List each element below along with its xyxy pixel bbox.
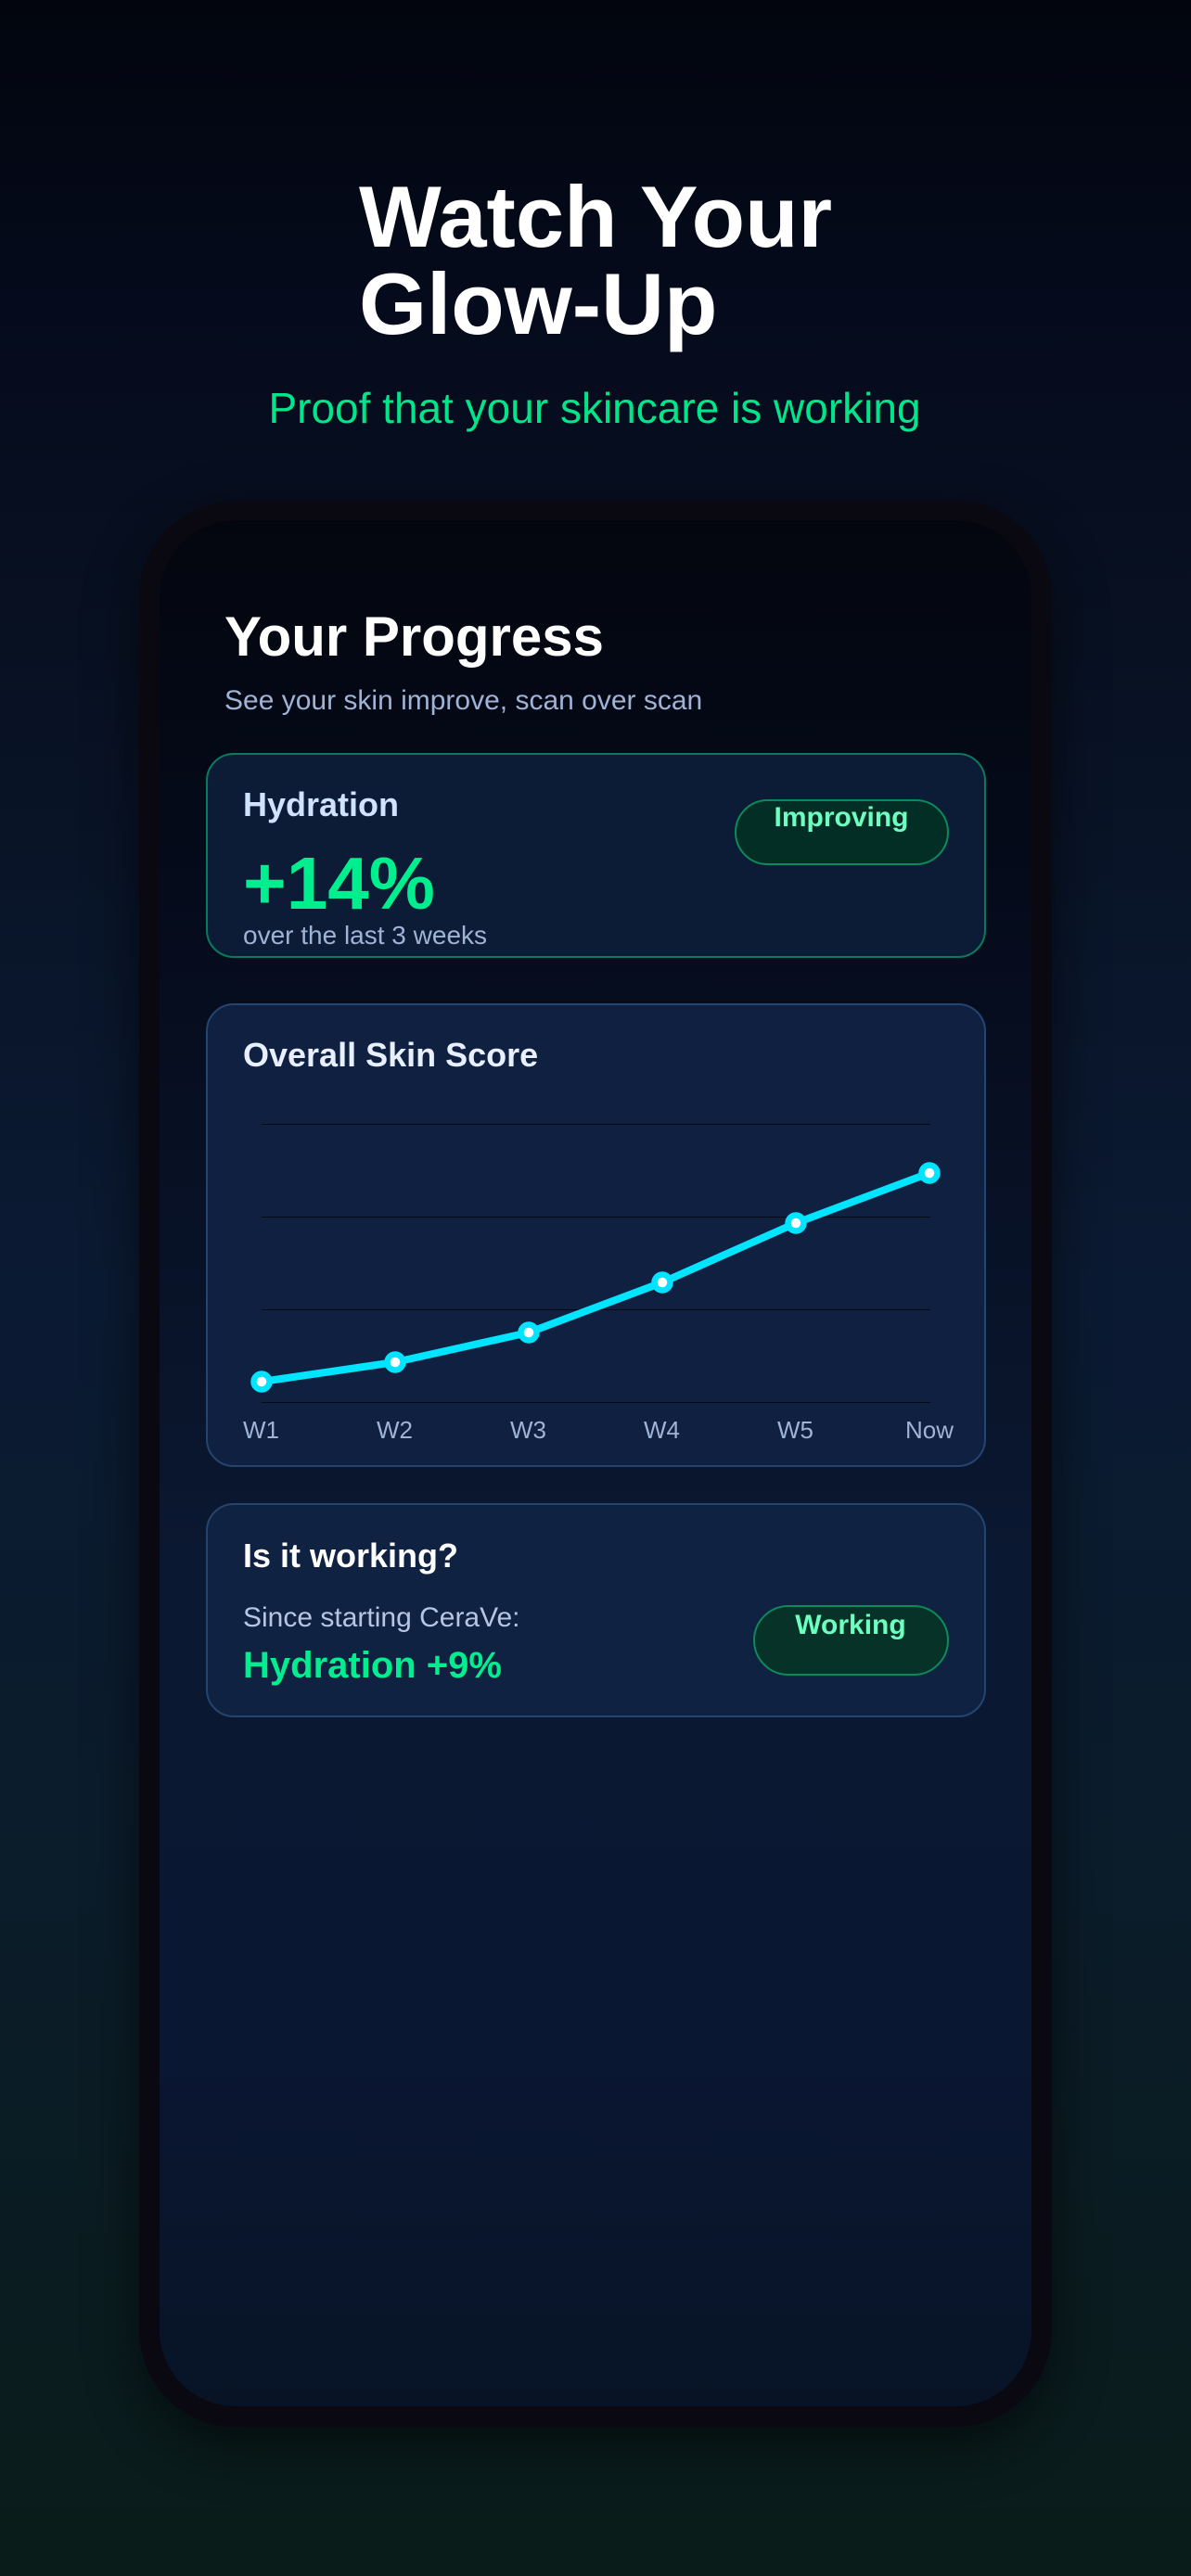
- chart axis labels: W3: [510, 1416, 546, 1444]
- chart axis labels: Now: [905, 1416, 954, 1444]
- chart axis labels: W2: [377, 1416, 413, 1444]
- title: Watch Your: [359, 168, 832, 265]
- since label: Since starting CeraVe:: [243, 1602, 519, 1633]
- panel: is it working: [207, 1504, 985, 1716]
- panel: hydration: [207, 754, 985, 957]
- line chart: [254, 1124, 937, 1402]
- chart axis labels: W4: [644, 1416, 680, 1444]
- title: [359, 168, 832, 352]
- panel heading: Is it working?: [243, 1537, 458, 1575]
- hydration label: Hydration: [243, 785, 399, 823]
- hydration value: +14%: [243, 842, 435, 925]
- panel: overall skin score: [207, 1004, 985, 1466]
- chart axis labels: [243, 1416, 954, 1444]
- phone screen: [160, 520, 1031, 2406]
- badge: improving: [736, 800, 948, 864]
- screen heading: Your Progress: [224, 606, 604, 668]
- badge: working: [754, 1606, 948, 1675]
- subtitle: Proof that your skincare is working: [268, 384, 921, 432]
- title: Glow-Up: [359, 255, 717, 352]
- phone frame: [139, 501, 1052, 2427]
- chart axis labels: W5: [777, 1416, 813, 1444]
- badge: working: Working: [795, 1610, 906, 1640]
- result: Hydration +9%: [243, 1645, 502, 1686]
- chart axis labels: W1: [243, 1416, 279, 1444]
- badge: improving: Improving: [774, 802, 909, 833]
- screen subheading: See your skin improve, scan over scan: [224, 685, 702, 716]
- hydration period: over the last 3 weeks: [243, 921, 487, 950]
- phone mockup: [139, 501, 1052, 2445]
- chart title: Overall Skin Score: [243, 1036, 538, 1074]
- phone shadow: [139, 519, 1052, 2445]
